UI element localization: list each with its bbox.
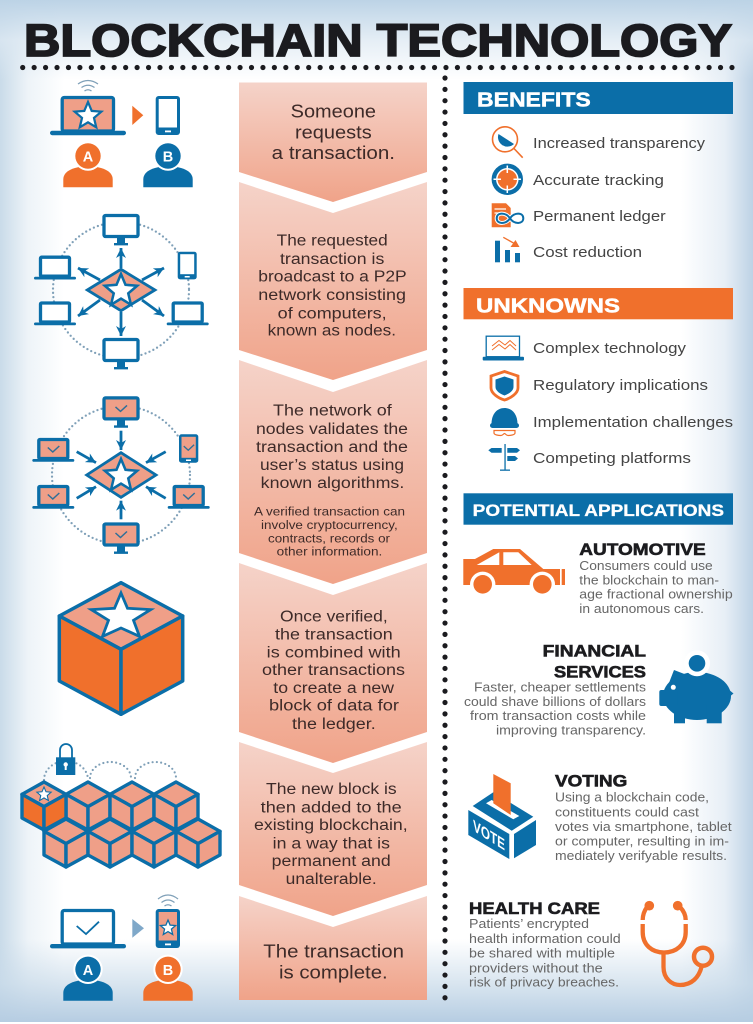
text: voting description: mediately verifyable results. [555, 848, 727, 863]
title: BLOCKCHAIN TECHNOLOGY [24, 15, 732, 66]
step 4: new block: to create a new [273, 680, 395, 697]
step 5: add to chain: then added to the [261, 799, 402, 816]
item: competing platforms: Competing platforms [533, 450, 691, 467]
text: voting description: Using a blockchain code, [555, 790, 709, 805]
panel: benefits [464, 82, 733, 262]
step 4: new block: block of data for [269, 698, 399, 715]
step 6: complete: The transaction [263, 941, 404, 961]
icon: blockchain of cubes [22, 744, 220, 867]
text: health care description: providers without the [469, 960, 603, 975]
icon: user A sends to user B: B [163, 150, 173, 166]
heading: health care: HEALTH CARE [469, 900, 600, 918]
step 3: validate: other information. [277, 545, 382, 559]
step 1: request: requests [295, 122, 372, 142]
icon: new data block cube [59, 583, 183, 714]
text: financial services description [464, 680, 647, 738]
heading: financial services [543, 643, 646, 681]
icon: ledger with infinity [492, 203, 523, 227]
text: financial services description: could shave billions of dollars [464, 694, 647, 709]
heading: financial services: SERVICES [554, 663, 646, 681]
step 2: broadcast: of computers, [278, 305, 387, 322]
application: voting [468, 773, 732, 863]
step 5: add to chain: unalterable. [286, 871, 377, 888]
icon: broadcast network [34, 216, 209, 369]
heading: potential applications: POTENTIAL APPLICATIONS [473, 502, 724, 520]
text: automotive description [579, 558, 733, 616]
icon: transaction complete A to B: A [83, 963, 94, 979]
text: health care description [469, 916, 621, 990]
text: voting description: votes via smartphone, tablet [555, 819, 732, 834]
icon: user A sends to user B [50, 80, 193, 187]
step 3: validate: known algorithms. [261, 475, 404, 492]
step 3: validate: transaction and the [256, 439, 408, 456]
text: health care description: Patients’ encrypted [469, 916, 589, 931]
item: accurate tracking: Accurate tracking [533, 172, 664, 189]
icon: laptop with zigzag [483, 336, 524, 360]
text: voting description: constituents could cast [555, 805, 699, 820]
item: complex technology: Complex technology [533, 340, 687, 357]
text: financial services description: improving transparency. [496, 723, 646, 738]
step 4: new block: other transactions [262, 662, 405, 679]
icon: falling bars [495, 237, 520, 262]
icon: validating network [32, 398, 210, 554]
icon: user A sends to user B: A [83, 150, 94, 166]
text: health care description: risk of privacy breaches. [469, 975, 619, 990]
icon: signpost [488, 444, 520, 471]
step 5: add to chain: The new block is [266, 781, 397, 798]
step 6: complete: is complete. [279, 962, 388, 982]
icon: shield [491, 372, 518, 400]
step 6: complete [239, 896, 427, 1000]
step 3: validate: A verified transaction can [254, 505, 405, 519]
heading: automotive: AUTOMOTIVE [579, 541, 706, 559]
step 4: new block: Once verified, [280, 609, 388, 626]
item: cost reduction: Cost reduction [533, 244, 642, 261]
step 2: broadcast: network consisting [258, 287, 406, 304]
step 1: request [239, 82, 427, 202]
step 4: new block [239, 563, 427, 763]
text: voting description [555, 790, 732, 863]
step 5: add to chain: existing blockchain, [254, 817, 408, 834]
step 4: new block: is combined with [267, 644, 401, 661]
icon: magnifier [492, 127, 523, 158]
item: regulatory implications: Regulatory implications [533, 377, 708, 394]
icon: target [492, 164, 523, 195]
text: health care description: be shared with multiple [469, 946, 615, 961]
step 2: broadcast: known as nodes. [268, 323, 396, 340]
step 3: validate: involve cryptocurrency, [261, 518, 398, 532]
panel: potential applications [463, 493, 734, 990]
application: automotive [463, 541, 733, 616]
heading: voting: VOTING [555, 773, 627, 791]
step 3: validate [239, 360, 427, 584]
step 5: add to chain: permanent and [272, 853, 391, 870]
icon: transaction complete A to B: B [163, 963, 173, 979]
step 3: validate: contracts, records or [268, 531, 390, 545]
step 2: broadcast: The requested [277, 233, 388, 250]
heading: potential applications [464, 493, 733, 525]
step 1: request: Someone [291, 102, 376, 122]
item: permanent ledger: Permanent ledger [533, 208, 666, 225]
item: increased transparency: Increased transparency [533, 135, 706, 152]
heading: benefits [464, 82, 733, 114]
heading: unknowns [464, 288, 733, 319]
text: automotive description: the blockchain to man- [579, 572, 719, 587]
text: automotive description: age fractional ownership [579, 587, 733, 602]
step 2: broadcast: broadcast to a P2P [258, 269, 407, 286]
step 3: validate: The network of [273, 403, 392, 420]
step 2: broadcast [239, 182, 427, 380]
icon: stethoscope [643, 901, 712, 985]
panel: process steps [239, 82, 427, 1000]
step 4: new block: the transaction [275, 626, 393, 643]
step 1: request: a transaction. [272, 143, 395, 163]
text: financial services description: from transaction costs while [470, 708, 646, 723]
step 4: new block: the ledger. [292, 716, 376, 733]
icon: hard hat and goggles [490, 408, 519, 436]
step 2: broadcast: transaction is [280, 251, 385, 268]
icon: ballot box: VOTE [473, 816, 505, 854]
text: health care description: health information could [469, 931, 621, 946]
icon: car [463, 549, 565, 597]
step 5: add to chain: in a way that is [273, 835, 390, 852]
application: health care [469, 900, 712, 990]
panel: unknowns [464, 288, 733, 471]
heading: financial services: FINANCIAL [543, 643, 646, 661]
step 5: add to chain [239, 742, 427, 916]
heading: unknowns: UNKNOWNS [476, 294, 620, 318]
heading: benefits: BENEFITS [477, 88, 591, 112]
item: implementation challenges: Implementation challenges [533, 414, 733, 431]
step 3: validate: nodes validates the [256, 421, 408, 438]
text: automotive description: Consumers could use [579, 558, 713, 573]
text: voting description: or computer, resulting in im- [555, 834, 729, 849]
text: automotive description: in autonomous cars. [579, 601, 704, 616]
application: financial services [464, 643, 734, 738]
step 3: validate: user’s status using [260, 457, 404, 474]
text: financial services description: Faster, cheaper settlements [474, 680, 647, 695]
icon: transaction complete A to B [50, 895, 193, 1001]
icon: piggy bank [659, 650, 734, 723]
icon: ballot box [468, 774, 536, 859]
